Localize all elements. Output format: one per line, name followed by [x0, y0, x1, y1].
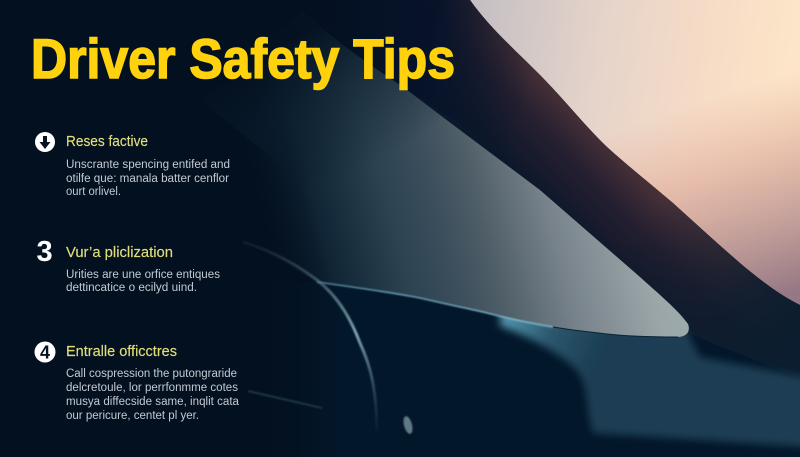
icon: number 3: 3 — [36, 236, 53, 268]
tip 1 text: otilfe que: manala batter cenflor — [66, 173, 229, 185]
windshield pillar — [280, 0, 800, 380]
tip 3 text — [66, 368, 240, 422]
tip 2 text — [66, 269, 220, 294]
tip 3 heading: Entralle officctres — [66, 344, 177, 360]
dashboard top edge — [317, 282, 678, 337]
tip 3 text: Call cospression the putongraride — [66, 368, 237, 380]
tip 3 text: delcretoule, lor perrfonmme cotes — [66, 382, 238, 394]
windshield sky — [470, 0, 800, 305]
steering wheel — [243, 242, 377, 430]
tip 3 text: our pericure, centet pl yer. — [66, 410, 199, 422]
tip 1 text — [66, 159, 230, 198]
tip 2 — [36, 236, 220, 294]
icon: down arrow in circle — [35, 132, 55, 152]
dashboard — [243, 282, 800, 457]
side window glass — [200, 13, 689, 337]
tip 1 — [35, 132, 230, 198]
tip 1 heading: Reses factive — [66, 134, 148, 150]
tip 3 text: musya diffecside same, inqlit cata — [66, 396, 240, 408]
dashboard knob — [402, 415, 414, 435]
icon: number 4 in circle — [34, 342, 56, 362]
tip 1 text: ourt orlivel. — [66, 186, 121, 198]
tip 2 heading: Vur’a pliclization — [66, 245, 173, 261]
tip 3 — [34, 342, 240, 422]
steering spoke — [248, 391, 322, 408]
tip 1 text: Unscrante spencing entifed and — [66, 159, 230, 171]
icon: number 4 in circle: 4 — [40, 342, 50, 362]
title: Driver Safety Tips — [31, 27, 455, 90]
tip 2 text: Urities are une orfice entiques — [66, 269, 220, 281]
tip 2 text: dettincatice o ecilyd uind. — [66, 282, 197, 294]
